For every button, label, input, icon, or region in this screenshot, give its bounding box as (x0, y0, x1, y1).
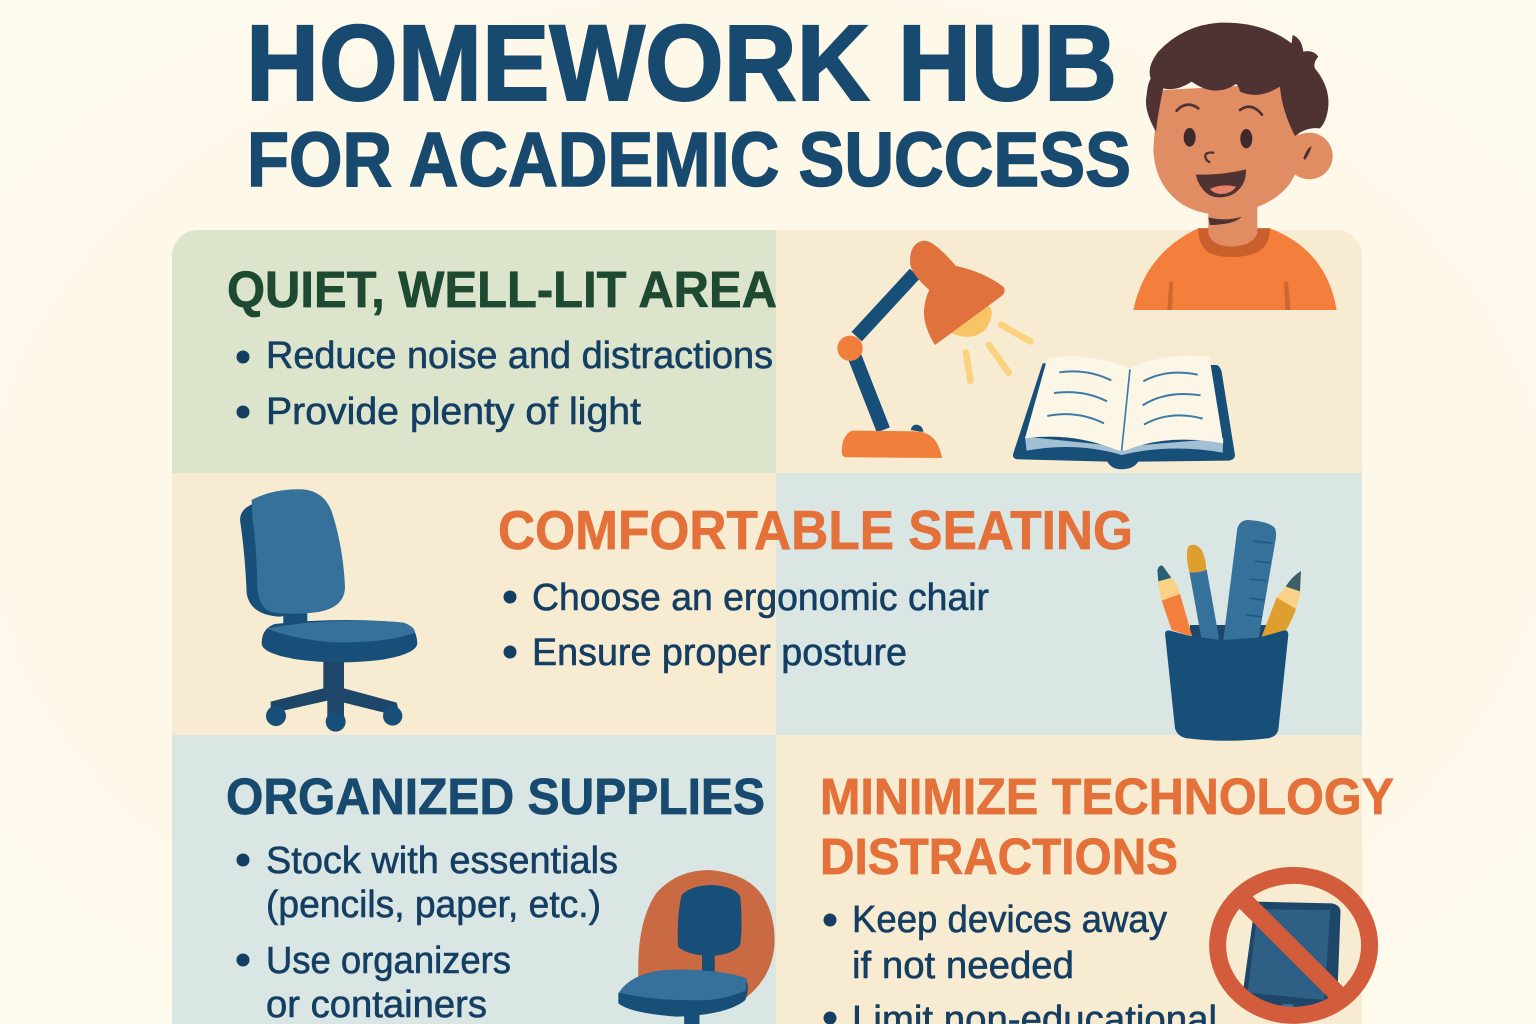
heading: minimize technology distractions: MINIMIZE TECHNOLOGY (820, 768, 1394, 825)
icon: no-tablet sign (1218, 875, 1370, 1015)
bullet list: supplies (236, 840, 618, 1024)
bullet list: seating: Choose an ergonomic chair (532, 577, 989, 619)
illustration: smiling boy (1133, 23, 1337, 310)
icon: open book (1013, 356, 1235, 469)
bullet list: technology (824, 899, 1217, 1024)
bullet list: supplies: (pencils, paper, etc.) (266, 884, 601, 926)
heading: organized supplies: ORGANIZED SUPPLIES (226, 768, 765, 825)
panel: quiet, well-lit area (172, 230, 1362, 473)
heading: minimize technology distractions: DISTRACTIONS (820, 828, 1178, 885)
bullet list: supplies: Use organizers (266, 940, 511, 982)
title line 1: HOMEWORK HUB (246, 2, 1117, 123)
panel: minimize technology distractions (776, 735, 1394, 1024)
panel: comfortable seating (172, 473, 1362, 741)
bullet list: quiet area: Provide plenty of light (266, 391, 641, 433)
icon: desk lamp (837, 241, 1030, 458)
bullet list: quiet area: Reduce noise and distractions (266, 335, 773, 377)
heading: comfortable seating: COMFORTABLE SEATING (498, 499, 1133, 561)
bullet list: quiet area (236, 335, 773, 433)
heading: minimize technology distractions (820, 768, 1394, 885)
title line 2: FOR ACADEMIC SUCCESS (247, 117, 1131, 203)
bullet list: seating: Ensure proper posture (532, 632, 907, 674)
icon: small chair on orange blob (618, 870, 775, 1024)
panel: organized supplies (172, 735, 776, 1024)
title (246, 2, 1131, 203)
bullet list: supplies: Stock with essentials (266, 840, 618, 882)
icon: office chair (240, 489, 417, 732)
icon: pencil cup (1157, 520, 1301, 741)
infographic canvas (172, 22, 1394, 1024)
heading: quiet area: QUIET, WELL-LIT AREA (227, 261, 777, 318)
bullet list: technology: Keep devices away (852, 899, 1167, 941)
bullet list: technology: if not needed (852, 945, 1074, 987)
bullet list: seating (504, 577, 989, 674)
